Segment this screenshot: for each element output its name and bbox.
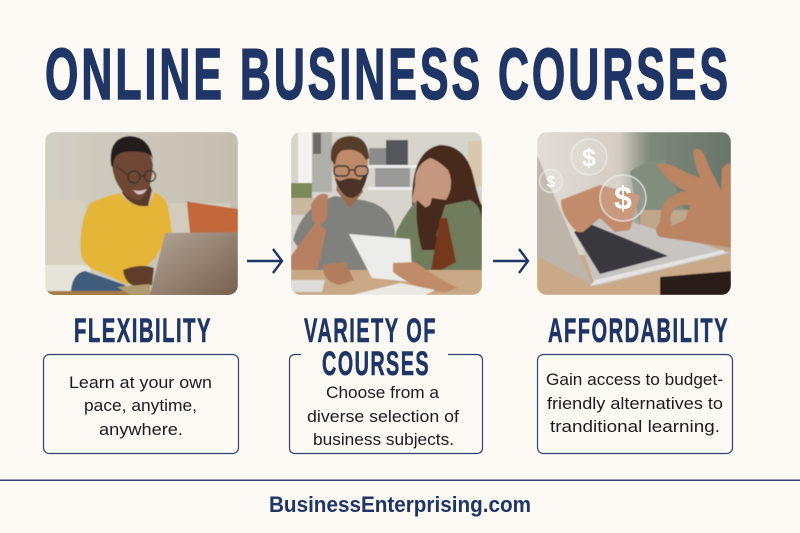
photo: hands on laptop with dollar bubbles bbox=[535, 132, 731, 295]
dollar bubble symbols bbox=[546, 148, 632, 212]
heading: Variety of Courses: COURSES bbox=[322, 345, 430, 383]
card: Affordability: tranditional learning. bbox=[550, 418, 720, 436]
card: Affordability: friendly alternatives to bbox=[547, 395, 723, 413]
photo: woman in yellow sweater using a laptop bbox=[45, 132, 238, 296]
card: Variety of Courses: Choose from a bbox=[326, 384, 440, 402]
footer divider bbox=[0, 480, 800, 481]
card: Flexibility: pace, anytime, bbox=[84, 397, 197, 415]
dollar bubble symbols: $ bbox=[547, 174, 556, 191]
dollar bubble symbols: $ bbox=[614, 180, 632, 216]
photo: man and woman reviewing a tablet bbox=[290, 132, 482, 295]
card: Affordability: Gain access to budget- bbox=[546, 371, 723, 389]
card: Variety of Courses: business subjects. bbox=[313, 431, 454, 449]
footer: website: BusinessEnterprising.com bbox=[269, 492, 531, 517]
heading: Flexibility: FLEXIBILITY bbox=[74, 312, 212, 350]
heading: Variety of Courses bbox=[304, 312, 437, 383]
card: Flexibility: anywhere. bbox=[99, 421, 183, 439]
dollar bubble symbols: $ bbox=[582, 144, 596, 172]
arrow 2 bbox=[493, 249, 528, 273]
card: Affordability bbox=[538, 354, 732, 454]
card: Flexibility: Learn at your own bbox=[69, 374, 212, 392]
card: Flexibility bbox=[44, 354, 238, 454]
heading: Variety of Courses: VARIETY OF bbox=[304, 312, 437, 350]
card: Variety of Courses bbox=[290, 312, 482, 454]
arrow 1 bbox=[247, 249, 282, 273]
card: Variety of Courses: diverse selection of bbox=[307, 408, 459, 426]
